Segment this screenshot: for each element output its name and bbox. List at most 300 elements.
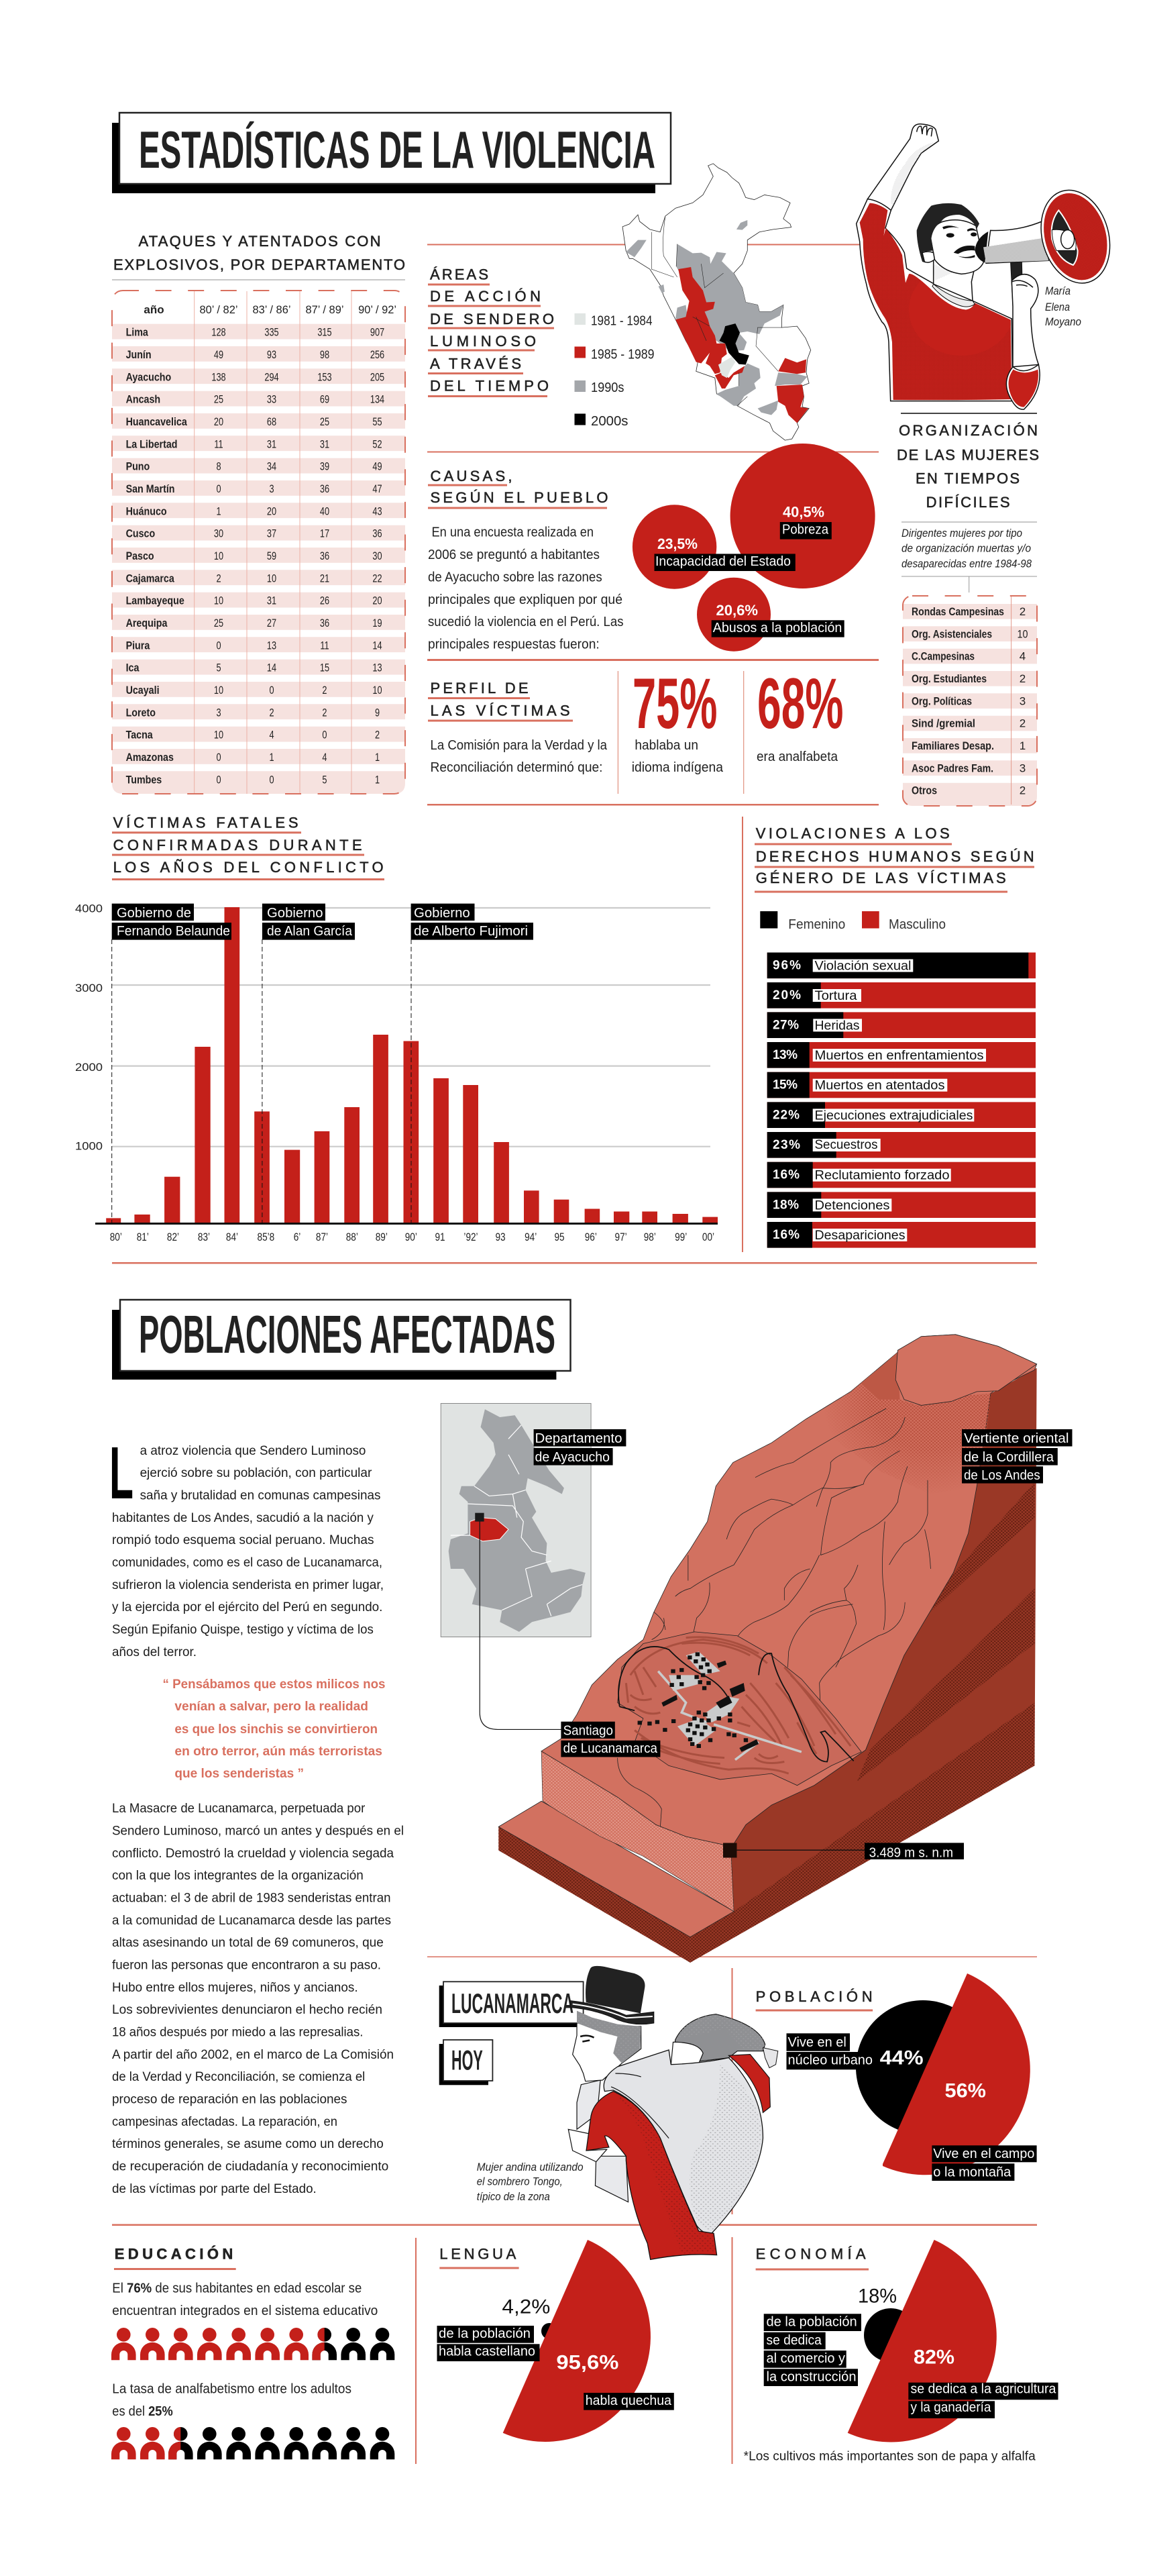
bar: desapariciones: 16% xyxy=(773,1228,800,1242)
main slope xyxy=(541,1335,1037,1849)
table values: 138 xyxy=(211,371,226,384)
illustration: mountain block diagram xyxy=(498,1335,1037,1963)
table values: 0 xyxy=(216,482,221,496)
small table rows: Org. Asistenciales xyxy=(912,627,992,640)
small table rows: Sind /gremial xyxy=(912,717,975,730)
table department names: Ancash xyxy=(126,394,160,406)
table values: 36 xyxy=(320,550,329,563)
table department names: Tacna xyxy=(126,729,153,741)
small table bands xyxy=(903,604,1037,806)
bar: detenciones xyxy=(767,1192,1036,1218)
table values: 2 xyxy=(269,707,274,719)
label: agricultura y ganadería: se dedica a la agricultura xyxy=(911,2382,1056,2397)
table values: 3 xyxy=(216,707,221,719)
megaphone xyxy=(975,182,1120,307)
table values: 27 xyxy=(267,617,276,630)
table values: 55 xyxy=(372,415,382,429)
label: comercio y construcción xyxy=(764,2314,861,2386)
table values: 40 xyxy=(320,505,329,518)
label: Departamento de Ayacucho: de Ayacucho xyxy=(535,1450,610,1465)
x axis: 94’ xyxy=(525,1231,537,1243)
article: intro text: años del terror. xyxy=(112,1645,197,1659)
text: La Comisión para la Verdad y la xyxy=(431,738,608,753)
label: campo o montaña: Vive en el campo xyxy=(933,2147,1034,2161)
table department names: Ica xyxy=(126,662,140,674)
chart grid and y axis labels: 2000 xyxy=(75,1061,103,1074)
map legend: 1981 - 1984 xyxy=(591,314,652,329)
table values: 294 xyxy=(264,371,279,384)
subtitle: de organización muertas y/o xyxy=(901,542,1031,554)
heading: ORGANIZACIÓN xyxy=(899,422,1038,439)
label: Santiago de Lucanamarca xyxy=(561,1722,660,1757)
article: massacre text: fueron las personas que encontraron a su paso. xyxy=(112,1958,381,1973)
label: altitude marker: 3.489 m s. n.m xyxy=(869,1845,953,1860)
bar: reclutamiento forzado: Reclutamiento forzado xyxy=(814,1169,950,1183)
x axis: 85’8 xyxy=(258,1231,274,1243)
bar: secuestros: 23% xyxy=(773,1138,800,1152)
bar: ejecuciones extrajudiciales: 22% xyxy=(773,1108,800,1122)
chart grid and y axis labels xyxy=(75,902,710,1153)
table department names: Junín xyxy=(126,349,152,361)
government marker: Fujimori: de Alberto Fujimori xyxy=(414,924,528,939)
caption: María Elena Moyano: María xyxy=(1045,285,1071,297)
bar: tortura: 20% xyxy=(773,988,801,1002)
heading: GÉNERO DE LAS VÍCTIMAS xyxy=(756,870,1006,886)
stat: 68%: era analfabeta xyxy=(757,750,838,764)
bar: ejecuciones extrajudiciales xyxy=(767,1102,1036,1128)
table values: 11 xyxy=(320,639,329,652)
heading: áreas de acción de Sendero Luminoso: DE ACCIÓN xyxy=(430,288,541,305)
map: Perú por periodos xyxy=(622,164,811,440)
heading: LOS AÑOS DEL CONFLICTO xyxy=(113,859,384,876)
bar: muertos en atentados xyxy=(767,1072,1036,1098)
chart grid and y axis labels: 3000 xyxy=(75,982,103,994)
paragraph: de Ayacucho sobre las razones xyxy=(428,570,602,584)
table values: 8 xyxy=(216,460,221,473)
government marker: Fujimori: Gobierno xyxy=(414,906,470,921)
table values: 1 xyxy=(269,751,274,764)
government marker: Fujimori xyxy=(411,904,533,1226)
pull quote: “ Pensábamos que estos milicos nos xyxy=(162,1678,385,1692)
title: Poblaciones afectadas: POBLACIONES AFECTADAS xyxy=(139,1304,555,1364)
table heading: EXPLOSIVOS, POR DEPARTAMENTO xyxy=(113,256,405,273)
label: comercio y construcción: de la población xyxy=(766,2315,857,2330)
bar: violación sexual xyxy=(767,953,1036,978)
caption: María Elena Moyano: Moyano xyxy=(1045,315,1081,328)
table row bands xyxy=(112,324,405,794)
text: integrated students: El 76% de sus habitantes en edad escolar se xyxy=(112,2281,362,2296)
panel: educación xyxy=(111,2246,394,2459)
bar: detenciones: 18% xyxy=(773,1198,799,1212)
heading xyxy=(112,815,384,880)
table values: 315 xyxy=(317,326,332,339)
pie chart: 56% xyxy=(944,2080,986,2102)
small table rows: 10 xyxy=(1017,627,1028,640)
table department names: Arequipa xyxy=(126,617,168,629)
heading: áreas de acción de Sendero Luminoso: ÁREAS xyxy=(430,266,488,283)
table values: 4 xyxy=(322,751,327,764)
small table rows: 4 xyxy=(1020,650,1026,663)
panel: economía xyxy=(744,2240,1058,2464)
pie chart: 18% xyxy=(858,2285,897,2308)
table values: 14 xyxy=(267,662,276,674)
article: massacre text: campesinas afectadas. La reparación, en xyxy=(112,2115,337,2129)
table department names: Tumbes xyxy=(126,774,162,786)
x axis: 91 xyxy=(435,1231,445,1243)
x axis: 84’ xyxy=(226,1231,238,1243)
bubble: incapacidad del estado: 23,5% xyxy=(657,535,698,552)
bubble: pobreza xyxy=(730,444,875,588)
pull quote: que los senderistas ” xyxy=(174,1767,304,1781)
paragraph: sucedió la violencia en el Perú. Las xyxy=(428,615,624,629)
table values: 13 xyxy=(267,639,276,652)
x axis: 81’ xyxy=(137,1231,149,1243)
table header: 83’ / 86’ xyxy=(252,303,291,316)
article: massacre text: Hubo entre ellos mujeres, niños y ancianos. xyxy=(112,1981,358,1995)
article: intro text: comunidades, como es el caso de Lucanamarca, xyxy=(112,1556,382,1570)
bar: tortura: Tortura xyxy=(814,989,857,1003)
table values: 33 xyxy=(267,393,276,406)
small table rows xyxy=(912,605,1028,797)
heading: LAS VÍCTIMAS xyxy=(431,702,570,719)
government marker: Belaunde: Fernando Belaunde xyxy=(117,924,230,939)
label: núcleo urbano xyxy=(786,2033,875,2069)
article: massacre text: con la que los integrantes de la organización xyxy=(112,1869,364,1883)
table department names xyxy=(126,327,187,786)
x axis: 96’ xyxy=(585,1231,597,1243)
table header: 80’ / 82’ xyxy=(200,303,237,316)
label: Departamento de Ayacucho xyxy=(534,1429,626,1465)
small table border xyxy=(903,596,1037,806)
table values: 153 xyxy=(317,371,332,384)
table values: 0 xyxy=(216,639,221,652)
table department names: Piura xyxy=(126,639,150,652)
table values: 31 xyxy=(267,438,276,451)
article: massacre text: Sendero Luminoso, marcó un antes y después en el xyxy=(112,1824,404,1839)
legend: Femenino xyxy=(788,917,845,932)
article: intro text xyxy=(109,1432,384,1659)
red shawl xyxy=(586,2092,717,2259)
rivers xyxy=(618,1408,930,1826)
upper halftone shading xyxy=(826,1353,991,1483)
small table rows: C.Campesinas xyxy=(912,650,975,663)
stat: 68% xyxy=(757,663,844,764)
table values: 49 xyxy=(214,348,223,362)
government marker: García xyxy=(262,904,355,1223)
small table rows: 2 xyxy=(1020,784,1026,797)
x axis: 00’ xyxy=(702,1231,714,1243)
table values: 1 xyxy=(216,505,221,518)
heading xyxy=(428,680,573,722)
article: massacre text: Los sobrevivientes denunciaron el hecho recién xyxy=(112,2003,382,2017)
label: comercio y construcción: la construcción xyxy=(766,2369,856,2384)
bar: reclutamiento forzado xyxy=(767,1162,1036,1188)
table values: 31 xyxy=(320,438,329,451)
table values: 0 xyxy=(269,684,274,697)
x axis: 82’ xyxy=(167,1231,179,1243)
x axis: 80’ xyxy=(110,1231,122,1243)
paragraph xyxy=(428,525,624,652)
illustration: María Elena Moyano con megáfono xyxy=(857,124,1120,409)
table values: 5 xyxy=(322,774,327,786)
chart grid and y axis labels: 4000 xyxy=(75,902,103,915)
table department names: Amazonas xyxy=(126,752,174,764)
label: habla castellano: habla castellano xyxy=(439,2345,535,2359)
table department names: Lima xyxy=(126,327,148,339)
legend xyxy=(760,911,946,932)
label: habla quechua: habla quechua xyxy=(586,2393,672,2408)
pull quote: en otro terror, aún más terroristas xyxy=(174,1745,382,1759)
bar: reclutamiento forzado: 16% xyxy=(773,1168,800,1182)
pictogram: 25% of people xyxy=(111,2427,394,2459)
shawl bundle xyxy=(604,2050,763,2234)
label: habla castellano: de la población xyxy=(439,2326,531,2341)
bar: heridas: 27% xyxy=(773,1018,799,1032)
article: massacre text: 18 años después por miedo a las represalias. xyxy=(112,2025,363,2040)
table department names: Loreto xyxy=(126,707,156,719)
x axis xyxy=(95,1223,718,1243)
paragraph: 2006 se preguntó a habitantes xyxy=(428,548,600,562)
bar: violación sexual: 96% xyxy=(773,959,801,973)
heading: áreas de acción de Sendero Luminoso: LUMINOSO xyxy=(430,333,536,350)
heading: SEGÚN EL PUEBLO xyxy=(431,489,608,506)
small table rows: Otros xyxy=(912,784,937,797)
x axis: 97’ xyxy=(615,1231,627,1243)
table values: 128 xyxy=(211,326,226,339)
heading: POBLACIÓN xyxy=(756,1988,873,2005)
chart grid and y axis labels: 1000 xyxy=(75,1140,103,1153)
heading: LENGUA xyxy=(439,2246,516,2263)
label: núcleo urbano: Vive en el xyxy=(787,2035,846,2050)
subtitle: Dirigentes mujeres por tipo xyxy=(901,527,1022,539)
table values: 30 xyxy=(372,550,382,563)
small table rows: Asoc Padres Fam. xyxy=(912,762,993,774)
title: Lucanamarca hoy: LUCANAMARCA xyxy=(451,1988,573,2019)
footnote: *Los cultivos más importantes son de papa y alfalfa xyxy=(744,2450,1036,2464)
hand and forearm xyxy=(1006,274,1040,409)
article: massacre text: La Masacre de Lucanamarca, perpetuada por xyxy=(112,1802,366,1816)
bar: desapariciones xyxy=(767,1222,1036,1248)
table values: 10 xyxy=(267,572,276,585)
bar: detenciones: Detenciones xyxy=(814,1198,889,1213)
table values: 31 xyxy=(267,595,276,607)
table values: 907 xyxy=(370,326,384,339)
map legend: 1990s xyxy=(591,380,624,395)
caption: mujer andina: el sombrero Tongo, xyxy=(477,2175,563,2188)
table values: 98 xyxy=(320,348,329,362)
x axis: 88’ xyxy=(346,1231,358,1243)
article: intro text: L xyxy=(109,1432,133,1514)
table values: 5 xyxy=(216,662,221,674)
label: campo o montaña: o la montaña xyxy=(933,2165,1011,2179)
x axis: 99’ xyxy=(675,1231,687,1243)
table department names: La Libertad xyxy=(126,438,177,451)
table values: 1 xyxy=(375,774,380,786)
table values: 49 xyxy=(372,460,382,473)
caption: mujer andina: típico de la zona xyxy=(477,2190,550,2203)
body and hand xyxy=(568,2080,628,2202)
table values: 10 xyxy=(372,684,382,697)
bubble: incapacidad del estado xyxy=(633,505,796,589)
bar: muertos en enfrentamientos: Muertos en enfrentamientos xyxy=(814,1049,983,1063)
text: illiteracy rate: es del 25% xyxy=(112,2404,173,2419)
label: Departamento de Ayacucho: Departamento xyxy=(535,1431,622,1446)
front wall xyxy=(498,1826,690,1963)
bubble: pobreza: Pobreza xyxy=(782,523,829,537)
table header: 87’ / 89’ xyxy=(306,303,343,316)
label: comercio y construcción: al comercio y xyxy=(766,2351,845,2366)
small table rows: 3 xyxy=(1020,762,1026,774)
table values: 25 xyxy=(320,415,329,429)
heading: áreas de acción de Sendero Luminoso: DE SENDERO xyxy=(430,311,554,327)
heading xyxy=(756,2246,869,2271)
heading: VIOLACIONES A LOS xyxy=(756,825,950,841)
table values: 34 xyxy=(267,460,276,473)
title: Lucanamarca hoy: HOY xyxy=(451,2044,483,2075)
cliff face xyxy=(541,1751,734,1912)
table heading: ATAQUES Y ATENTADOS CON xyxy=(138,233,381,250)
pull quote: es que los sinchis se convirtieron xyxy=(174,1722,378,1737)
table values: 39 xyxy=(320,460,329,473)
pie chart: 95,6% xyxy=(556,2352,618,2374)
label: Vertiente oriental: de Los Andes xyxy=(964,1468,1040,1483)
table header: año xyxy=(144,303,164,316)
table values xyxy=(211,326,384,786)
table values: 69 xyxy=(320,393,329,406)
small table rows: Org. Políticas xyxy=(912,694,972,707)
table values: 3 xyxy=(269,482,274,496)
subtitle: desaparecidas entre 1984-98 xyxy=(901,558,1032,570)
bubble: abusos a la población xyxy=(697,578,844,652)
table values: 335 xyxy=(264,326,279,339)
table values: 134 xyxy=(370,393,384,406)
map legend xyxy=(574,313,655,429)
government marker: García: Gobierno xyxy=(267,906,323,921)
table values: 36 xyxy=(320,617,329,630)
heading xyxy=(897,413,1039,523)
bubble: abusos a la población: 20,6% xyxy=(716,602,758,619)
plateau xyxy=(895,1335,1037,1405)
table header xyxy=(144,303,396,316)
table values: 59 xyxy=(267,550,276,563)
label: agricultura y ganadería: y la ganadería xyxy=(911,2400,991,2415)
article: massacre text: de recuperación de ciudadanía y reconocimiento xyxy=(112,2159,388,2174)
stat: 75%: 75% xyxy=(633,663,718,743)
small table rows: Org. Estudiantes xyxy=(912,672,987,685)
article: massacre text: a la comunidad de Lucanamarca desde las partes xyxy=(112,1914,391,1928)
x axis: 95 xyxy=(554,1231,565,1243)
bubble: incapacidad del estado: Incapacidad del Estado xyxy=(655,554,791,569)
paragraph: principales que expliquen por qué xyxy=(428,593,622,607)
small table rows: Familiares Desap. xyxy=(912,739,994,752)
government marker: García: de Alan García xyxy=(267,924,353,939)
paragraph: En una encuesta realizada en xyxy=(432,525,594,539)
Lucanamarca terraces and village xyxy=(618,1632,861,1786)
pie chart xyxy=(856,1973,1030,2175)
bar: desapariciones: Desapariciones xyxy=(814,1229,906,1243)
title: Lucanamarca hoy xyxy=(439,1981,584,2085)
x axis: 93 xyxy=(495,1231,506,1243)
bar: tortura xyxy=(767,982,1036,1009)
bar: ejecuciones extrajudiciales: Ejecuciones extrajudiciales xyxy=(814,1109,973,1123)
table values: 20 xyxy=(214,415,223,429)
table department names: Lambayeque xyxy=(126,595,184,607)
article: intro text: ejerció sobre su población, con particular xyxy=(140,1466,372,1480)
label: Santiago de Lucanamarca: Santiago xyxy=(563,1724,613,1739)
panel: lengua xyxy=(437,2240,674,2442)
text: illiteracy: La tasa de analfabetismo entre los adultos xyxy=(112,2382,351,2397)
heading: EDUCACIÓN xyxy=(115,2246,233,2263)
table department names: Huancavelica xyxy=(126,416,187,428)
table values: 13 xyxy=(372,662,382,674)
label: altitude marker xyxy=(723,1843,964,1860)
table values: 256 xyxy=(370,348,384,362)
head and hat xyxy=(570,1965,654,2081)
heading: áreas de acción de Sendero Luminoso: DEL TIEMPO xyxy=(430,378,549,395)
table values: 17 xyxy=(320,527,329,540)
article: massacre text: actuaban: el 3 de abril de 1983 senderistas entran xyxy=(112,1891,390,1906)
label: Vertiente oriental xyxy=(962,1429,1072,1484)
table values: 2 xyxy=(322,707,327,719)
table department names: Huánuco xyxy=(126,505,167,518)
article: massacre text: A partir del año 2002, en el marco de La Comisión xyxy=(112,2048,394,2062)
article: massacre text: altas asesinando un total de 69 comuneros, que xyxy=(112,1936,384,1950)
x axis: ’92’ xyxy=(463,1231,478,1243)
heading xyxy=(755,825,1034,892)
table values: 1 xyxy=(375,751,380,764)
pull quote: venían a salvar, pero la realidad xyxy=(174,1700,368,1714)
red shirt xyxy=(857,199,1014,401)
pictogram: 76% of people xyxy=(111,2328,394,2360)
table values: 0 xyxy=(322,729,327,741)
article: massacre text: de la Verdad y Reconciliación, se comienza el xyxy=(112,2070,365,2084)
heading: VÍCTIMAS FATALES xyxy=(113,815,298,831)
table values: 26 xyxy=(320,595,329,607)
raised arm xyxy=(867,124,938,210)
table heading xyxy=(112,233,405,280)
small table rows: 3 xyxy=(1020,694,1026,707)
table department names: Puno xyxy=(126,461,150,473)
heading xyxy=(114,2246,236,2270)
table values: 10 xyxy=(214,550,223,563)
government marker: Belaunde xyxy=(112,904,231,1223)
subtitle xyxy=(901,527,1037,593)
table values: 15 xyxy=(320,662,329,674)
panel: causas según el pueblo xyxy=(428,444,875,652)
label: Santiago de Lucanamarca: de Lucanamarca xyxy=(563,1741,658,1756)
table values: 20 xyxy=(267,505,276,518)
x axis: 90’ xyxy=(405,1231,417,1243)
heading: áreas de acción de Sendero Luminoso: A TRAVÉS xyxy=(430,356,521,372)
panel: población xyxy=(756,1973,1037,2181)
table values: 36 xyxy=(372,527,382,540)
caption: mujer andina xyxy=(477,2161,584,2203)
title: Estadísticas de la violencia: ESTADÍSTICAS DE LA VIOLENCIA xyxy=(139,120,655,179)
article: intro text: rompió todo esquema social peruano. Muchas xyxy=(112,1533,374,1547)
pull quote xyxy=(162,1678,385,1781)
label: núcleo urbano: núcleo urbano xyxy=(787,2053,873,2068)
illustration: mujer andina con sombrero tongo xyxy=(568,1965,778,2259)
legend: Masculino xyxy=(889,917,946,932)
government marker: Belaunde: Gobierno de xyxy=(117,906,191,921)
label: habla castellano xyxy=(437,2326,539,2361)
panel: ataques y atentados table xyxy=(112,233,405,794)
table values: 9 xyxy=(375,707,380,719)
map: Departamento de Ayacucho xyxy=(441,1404,591,1729)
table values: 11 xyxy=(214,438,223,451)
bubble: abusos a la población: Abusos a la población xyxy=(713,621,842,635)
table values: 25 xyxy=(214,393,223,406)
